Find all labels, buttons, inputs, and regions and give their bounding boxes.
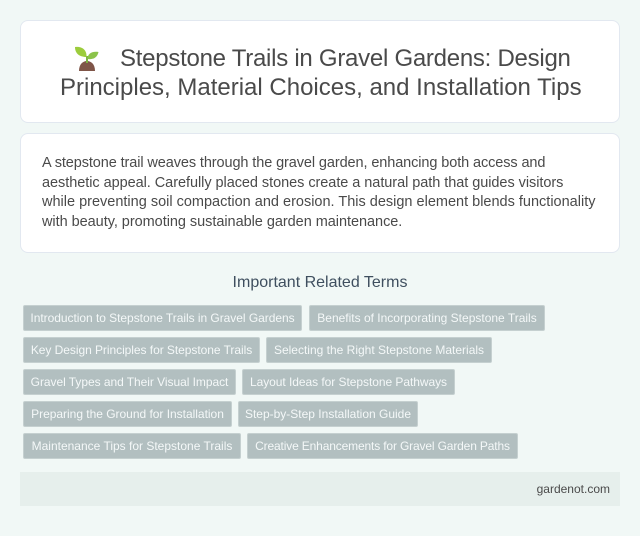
tag bbox=[23, 433, 241, 459]
tag: Selecting the Right Stepstone Materials bbox=[274, 343, 484, 357]
tag bbox=[266, 337, 492, 363]
tag: Maintenance Tips for Stepstone Trails bbox=[32, 439, 232, 453]
title line 2: Principles, Material Choices, and Installation Tips bbox=[60, 74, 582, 101]
tag bbox=[238, 401, 418, 427]
tag: Benefits of Incorporating Stepstone Trails bbox=[317, 311, 537, 325]
icon: seedling bbox=[75, 46, 98, 71]
tag: Key Design Principles for Stepstone Trails bbox=[31, 343, 252, 357]
tag: Gravel Types and Their Visual Impact bbox=[31, 375, 228, 389]
title line 1: Stepstone Trails in Gravel Gardens: Design bbox=[120, 45, 571, 72]
tag: Layout Ideas for Stepstone Pathways bbox=[250, 375, 447, 389]
paragraph line 4: with beauty, promoting sustainable garden maintenance. bbox=[42, 214, 402, 230]
panel: title card bbox=[20, 20, 620, 123]
tag bbox=[309, 305, 545, 331]
footer bar bbox=[20, 472, 620, 506]
panel: intro text bbox=[20, 133, 620, 253]
paragraph line 1: A stepstone trail weaves through the gravel garden, enhancing both access and bbox=[42, 155, 545, 171]
heading: related terms: Important Related Terms bbox=[233, 274, 407, 291]
footer credit: gardenot.com bbox=[537, 482, 610, 496]
tag: Preparing the Ground for Installation bbox=[31, 407, 224, 421]
tag bbox=[242, 369, 455, 395]
tag bbox=[23, 305, 302, 331]
tag: Creative Enhancements for Gravel Garden Paths bbox=[255, 439, 510, 453]
paragraph line 3: while preventing soil compaction and erosion. This design element blends functionality bbox=[42, 194, 595, 210]
tag bbox=[23, 337, 260, 363]
tag: Step-by-Step Installation Guide bbox=[245, 407, 411, 421]
paragraph line 2: aesthetic appeal. Carefully placed stones create a natural path that guides visitors bbox=[42, 175, 563, 191]
tag: Introduction to Stepstone Trails in Gravel Gardens bbox=[30, 311, 295, 325]
tag bbox=[23, 369, 236, 395]
tag bbox=[23, 401, 232, 427]
tag bbox=[247, 433, 518, 459]
